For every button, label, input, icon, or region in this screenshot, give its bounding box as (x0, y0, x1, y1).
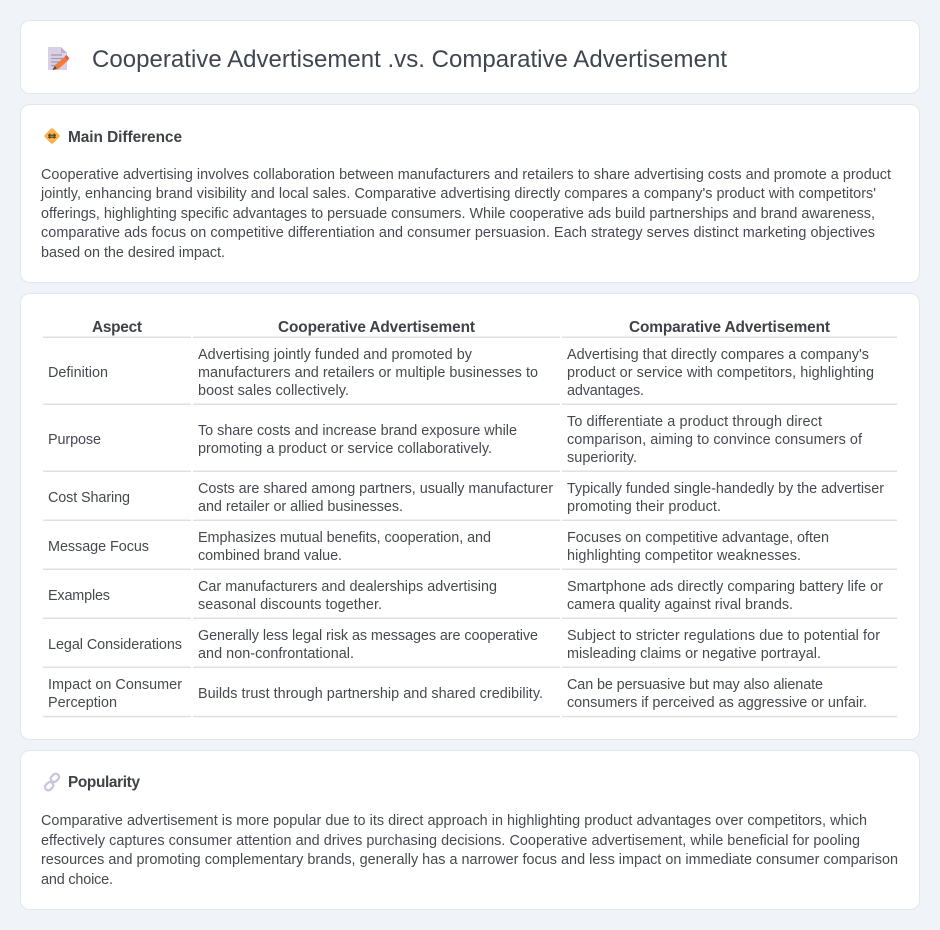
text block: main difference: based on the desired impact. (41, 245, 225, 261)
text block: main difference: comparative ads focus on competitive differentiation and consumer persuasion. Each strategy serves distinct marketing objectives (41, 225, 875, 241)
panel: header (20, 20, 920, 94)
table row: definition: advantages. (567, 383, 644, 399)
table row: purpose (48, 414, 863, 466)
table row: definition: Advertising that directly compares a company's (567, 347, 869, 363)
table row: examples: seasonal discounts together. (198, 597, 382, 613)
table row: examples: Smartphone ads directly comparing battery life or (567, 579, 883, 595)
table row: impact on consumer perception: Can be persuasive but may also alienate (567, 677, 823, 693)
text block: main difference (40, 167, 891, 261)
table row: legal considerations: Generally less legal risk as messages are cooperative (198, 628, 538, 644)
table row: definition: manufacturers and retailers or multiple businesses to (198, 365, 538, 381)
table row: purpose: comparison, aiming to convince consumers of (567, 432, 863, 448)
table row: cost sharing: Cost Sharing (48, 490, 130, 506)
table row: cost sharing: Costs are shared among partners, usually manufacturer (198, 481, 553, 497)
table header row (92, 319, 830, 336)
text block: popularity: resources and promoting complementary brands, generally has a narrower focus and less impact on immediate consumer comparison (41, 852, 898, 868)
table row: purpose: To differentiate a product through direct (567, 414, 822, 430)
heading: main difference: Main Difference (68, 129, 182, 146)
table row: cost sharing: and retailer or allied businesses. (198, 499, 403, 515)
icon: document with pencil (48, 47, 69, 70)
table row: message focus: combined brand value. (198, 548, 342, 564)
panel: popularity (20, 750, 920, 910)
table row: examples: Examples (48, 588, 110, 604)
icon: warning diamond (44, 128, 60, 144)
heading: popularity: Popularity (68, 774, 140, 791)
table row: message focus: Focuses on competitive advantage, often (567, 530, 829, 546)
table header row: Comparative Advertisement (629, 319, 830, 336)
text block: main difference: Cooperative advertising involves collaboration between manufacturers and retailers to share advertising costs and promote a product (41, 167, 891, 183)
table row: legal considerations: Legal Considerations (48, 637, 182, 653)
icon: link (44, 772, 60, 792)
table row: examples: Car manufacturers and dealerships advertising (198, 579, 497, 595)
table row: cost sharing: Typically funded single-handedly by the advertiser (567, 481, 884, 497)
table row: impact on consumer perception: Perception (48, 695, 117, 711)
panel: main difference (20, 104, 920, 282)
text block: popularity: and choice. (41, 872, 113, 888)
table row: legal considerations: misleading claims or negative portrayal. (567, 646, 821, 662)
table row: examples (48, 579, 883, 613)
table row: message focus (48, 530, 829, 564)
table row: definition (48, 347, 874, 399)
table row: examples: camera quality against rival brands. (567, 597, 793, 613)
table row: definition: Advertising jointly funded and promoted by (198, 347, 473, 363)
text block: main difference: jointly, enhancing brand visibility and local sales. Comparative advertising directly compares a company's product with competitors' (40, 186, 876, 202)
table row: purpose: superiority. (567, 450, 637, 466)
title: Cooperative Advertisement .vs. Comparative Advertisement (92, 46, 727, 73)
table row: legal considerations: and non-confrontational. (198, 646, 354, 662)
table row: purpose: To share costs and increase brand exposure while (198, 423, 517, 439)
table row: impact on consumer perception: consumers if perceived as aggressive or unfair. (567, 695, 867, 711)
table row: purpose: Purpose (48, 432, 101, 448)
table row: impact on consumer perception: Builds trust through partnership and shared credibility. (198, 686, 543, 702)
table row: message focus: Message Focus (48, 539, 149, 555)
table row: impact on consumer perception: Impact on Consumer (48, 677, 182, 693)
table row: message focus: Emphasizes mutual benefits, cooperation, and (198, 530, 491, 546)
table row: legal considerations: Subject to stricter regulations due to potential for (567, 628, 880, 644)
table row: impact on consumer perception (48, 677, 867, 711)
table header row: Aspect (92, 319, 142, 336)
text block: popularity: effectively captures consumer attention and drives purchasing decisions. Cooperative advertisement, while beneficial for pooling (41, 833, 860, 849)
text block: popularity (41, 813, 898, 888)
text block: popularity: Comparative advertisement is more popular due to its direct approach in highlighting product advantages over competitors, which (41, 813, 867, 829)
panel: comparison table (20, 294, 920, 740)
text block: main difference: offerings, highlighting specific advantages to persuade consumers. While cooperative ads build partnerships and brand awareness, (41, 206, 875, 222)
table row: message focus: highlighting competitor weaknesses. (567, 548, 801, 564)
table row: definition: Definition (48, 365, 108, 381)
table header row: Cooperative Advertisement (278, 319, 475, 336)
table row: definition: boost sales collectively. (198, 383, 349, 399)
table row: legal considerations (48, 628, 880, 662)
table row: purpose: promoting a product or service collaboratively. (198, 441, 492, 457)
table row: cost sharing (48, 481, 884, 515)
table row: cost sharing: promoting their product. (567, 499, 721, 515)
table row: definition: product or service with competitors, highlighting (567, 365, 874, 381)
